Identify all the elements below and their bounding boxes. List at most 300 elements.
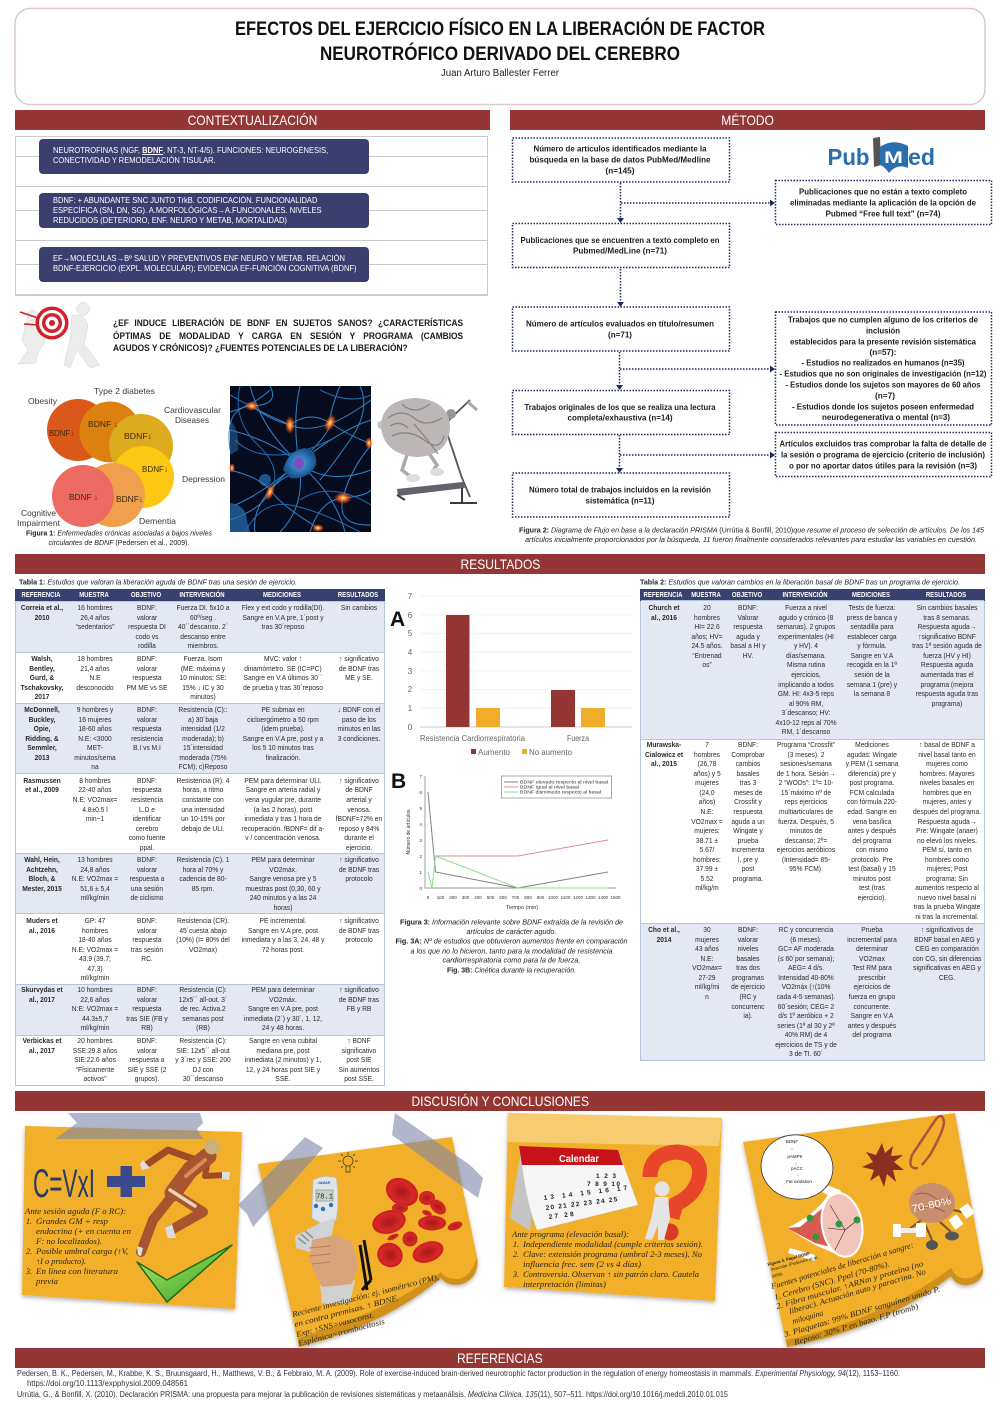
- table 1 header: REFERENCIA: [22, 590, 60, 599]
- row: Murawska: N.E:: [701, 807, 713, 816]
- row: Murawska: años): [699, 797, 715, 806]
- icon: calendar: 13 14 15 16 17: [543, 1185, 628, 1202]
- row: Murawska: hombres: [694, 750, 720, 759]
- chart A: studies with BDNF increase by modality: 5: [408, 629, 413, 638]
- row: Murawska: VO2max =: [691, 817, 723, 826]
- table 1 header: OBJETIVO: [131, 590, 161, 599]
- row: Murawska: mujeres: [695, 778, 719, 787]
- row: Church: RM, 1´descanso: [782, 727, 830, 736]
- row: Murawska: ml/kg/m: [695, 883, 719, 892]
- row: McDonnell: Buckley,: [29, 715, 55, 724]
- row: Murawska: Crossfit y: [734, 797, 762, 806]
- row: Walsh: 21,4 años: [80, 664, 110, 673]
- row: Church: HI= 22.6: [694, 622, 720, 631]
- chart B: recovery kinetics: 800: [524, 895, 532, 900]
- box: inclusion criteria exclusion: - Estudios donde los sujetos poseen enfermedad: [792, 401, 974, 411]
- box: included studies: [512, 473, 730, 517]
- row: Rasmussen: debajo de ULI.: [181, 824, 225, 833]
- note 3 text: 3.: [512, 1270, 519, 1279]
- row: Murawska: tras 3: [740, 778, 756, 787]
- chart B: recovery kinetics: [391, 770, 621, 911]
- row: Church: Tests de fuerza:: [849, 603, 895, 612]
- note 2 text: [290, 1272, 440, 1348]
- row: Murawska: (24,0: [699, 788, 715, 797]
- row: Muders: valorar: [137, 926, 157, 935]
- row: Correia: codo vs: [136, 632, 158, 641]
- icon: PubMed logo: M: [884, 148, 903, 167]
- row: Church: hombres: [694, 613, 720, 622]
- row: Murawska: nivel basal tanto en: [918, 750, 976, 759]
- chart B: recovery kinetics: B: [391, 770, 406, 793]
- row: Church: Fuerza a nivel: [785, 603, 827, 612]
- row: Rasmussen: Rasmussen: [23, 776, 61, 785]
- row: Murawska: 37.99 ±: [696, 864, 718, 873]
- row: Cho: cada 4-5 semanas).: [777, 992, 835, 1001]
- row: McDonnell: N.E: <3000: [78, 734, 112, 743]
- row: Church: aguda y: [736, 632, 760, 641]
- reference list: Urrútia, G., & Bonfill, X. (2010). Declaración PRISMA: una propuesta para mejorar la publicación de revisiones sistemáticas y metaanálisis. Medicina Clínica, 135(11), 507–511. https://doi.org/10.1016/j.medcli.2010.01.015: [17, 1390, 729, 1399]
- row: Walsh: minutos): [190, 692, 216, 701]
- row: Correia: “sedentarios”: [76, 622, 114, 631]
- row: Correia: 2010: [35, 613, 49, 622]
- row: Wahl: PEM para determinar: [251, 855, 315, 864]
- row: Wahl: VO2máx.: [269, 865, 297, 874]
- row: Murawska: mujeres, antes y: [923, 797, 971, 806]
- row: Cho: (≤ 60´por semana);: [778, 954, 834, 963]
- row: Cho: ml/kg/mi: [695, 982, 719, 991]
- chart B: recovery kinetics: 400: [474, 895, 482, 900]
- row: Murawska: 38.71 ±: [696, 836, 718, 845]
- row: Wahl: 240 minutos y a las 24: [250, 893, 316, 902]
- row: Verbickas: ↑ BDNF: [347, 1036, 371, 1045]
- chart: venn of chronic diseases and BDNF: BDNF ↓: [69, 492, 98, 502]
- icon: muscle cross-section: [770, 1165, 867, 1261]
- chart B: recovery kinetics: 4: [419, 822, 422, 827]
- row: Muders: Resistencia (CR).: [177, 916, 229, 925]
- table 2 header: MEDICIONES: [852, 590, 890, 599]
- row: Murawska: post: [742, 864, 754, 873]
- row: Rasmussen: recuperación. fBDNF= dif a-: [242, 824, 324, 833]
- note 4 text: 1. Cerebro (SNC). Ppal (70-80%).: [773, 1259, 891, 1302]
- chart B: recovery kinetics: 5: [419, 806, 422, 811]
- box: title and abstract: (n=71): [608, 329, 632, 339]
- row: Murawska: Wingate y: [733, 826, 763, 835]
- row: Church: tras 8 semanas.: [923, 613, 971, 622]
- row: Verbickas: Resistencia (C):: [179, 1036, 227, 1045]
- row: Rasmussen: cerebro: [136, 824, 158, 833]
- diagram: BDNF signalling circle: [756, 1129, 838, 1205]
- chart B: recovery kinetics: BDNF disminuido respecto al basal: [520, 790, 601, 794]
- note 1 text: 2.: [26, 1247, 32, 1256]
- row: Church: años; HV=: [691, 632, 723, 641]
- row: Murawska: minutos post: [853, 874, 891, 883]
- row: Church: programa): [932, 699, 962, 708]
- row: McDonnell: 15´intensidad: [183, 743, 223, 752]
- box: inclusion criteria exclusion: neurodegenerativa o mental (n=3): [822, 412, 950, 422]
- row: Wahl: Wahl, Hein,: [24, 855, 60, 864]
- row: Murawska: diferencia) pre y: [848, 769, 896, 778]
- row: Walsh: PM ME vs SE: [126, 683, 168, 692]
- formula C=VxI: C=VxI: [33, 1162, 95, 1206]
- box: inclusion criteria exclusion: [776, 312, 992, 425]
- icon: calendar: 20 21 22 23 24 25: [545, 1196, 618, 1212]
- caption: figure 3: Figura 3: Información relevante sobre BDNF extraída de la revisión de: [400, 920, 623, 926]
- chart B: recovery kinetics: 600: [499, 895, 507, 900]
- diagram: BDNF signalling circle: BDNF: [786, 1139, 798, 1144]
- icon: PubMed logo: ed: [908, 144, 935, 170]
- row: McDonnell: finalización.: [266, 753, 300, 762]
- row: Correia: Sin cambios: [341, 603, 377, 612]
- table 1 header: MUESTRA: [79, 590, 109, 599]
- row: Wahl: respuesta a: [130, 874, 164, 883]
- row: Verbickas: Verbickas et: [23, 1036, 61, 1045]
- row: Verbickas: al., 2017: [29, 1046, 55, 1055]
- row: McDonnell: Sangre en V.A pre, post y a: [243, 734, 323, 743]
- row: Cho: (6 meses).: [790, 935, 822, 944]
- note 2 text: Exp: ↑SNS=vasoconst.: [294, 1310, 375, 1339]
- row: Cho: valorar: [738, 935, 758, 944]
- row: Skurvydas: respuesta: [132, 1004, 162, 1013]
- row: Cho: VO2max: [859, 954, 885, 963]
- note 3 text: Controversia. Observan ↑ sin patrón claro. Cautela: [523, 1270, 699, 1279]
- row: McDonnell: 16 mujeres: [79, 715, 111, 724]
- row: Church: la semana 8: [854, 689, 890, 698]
- diagram: BDNF signalling circle: ↓: [797, 1172, 799, 1177]
- chart A: studies with BDNF increase by modality: [390, 592, 632, 757]
- row: Rasmussen: venosa.: [347, 805, 371, 814]
- row: Murawska: agudas: Wingate: [847, 750, 897, 759]
- caption: figure 3: artículos de carácter agudo.: [466, 929, 557, 936]
- caption: figure 3: cardiorrespiratoria como para la de fuerza.: [442, 958, 581, 965]
- row: Wahl: de ciclismo: [131, 893, 163, 902]
- row: McDonnell: paso de los: [342, 715, 376, 724]
- row: Muders: ↑ significativo: [339, 916, 379, 925]
- row: Rasmussen: resistencia: [131, 795, 163, 804]
- row: Cho: series (1ª al 30 y 2ª: [777, 1021, 835, 1030]
- chart A: studies with BDNF increase by modality: 2: [408, 685, 413, 694]
- box: inclusion criteria exclusion: establecidos para la presente revisión sistemática: [790, 336, 976, 346]
- row: Cho: Sangre en V.A: [851, 1011, 893, 1020]
- note 1 text: En línea con literatura: [35, 1267, 118, 1276]
- heading: método: MÉTODO: [721, 112, 774, 128]
- row: Murawska: (3 meses). 2: [788, 750, 824, 759]
- row: Church: Respuesta aguda: [921, 660, 973, 669]
- row: McDonnell: moderada); b): [182, 734, 224, 743]
- reference list: https://doi.org/10.1113/expphysiol.2009.048561: [27, 1379, 188, 1388]
- caption: figure 4: [767, 1251, 820, 1279]
- box: full reading: [512, 390, 730, 434]
- panel: discussion notes: [20, 1112, 986, 1348]
- box: full text publications: Publicaciones que se encuentren a texto completo en: [520, 235, 720, 245]
- row: Skurvydas: 24 y 48 horas.: [262, 1023, 304, 1032]
- row: Rasmussen: Resistencia (R). 4: [177, 776, 229, 785]
- box: included studies: Número total de trabajos incluidos en la revisión: [529, 485, 711, 495]
- table 1 header: [15, 589, 385, 601]
- row: Murawska: meses de: [734, 788, 762, 797]
- row: McDonnell: intensidad (1/2: [181, 724, 225, 733]
- caption: figure 1: [26, 530, 212, 547]
- row: Church: agudo y crónico (8: [779, 613, 833, 622]
- row: Walsh: de prueba y tras 30´reposo: [243, 683, 323, 692]
- row: Skurvydas: 12x5´´ all-out. 3´: [179, 995, 227, 1004]
- row: McDonnell: a) 30´baja: [188, 715, 218, 724]
- row: Cho: incremental para: [847, 935, 897, 944]
- row: Correia: BDNF:: [137, 603, 157, 612]
- icon: muscular runner: [141, 1150, 226, 1252]
- row: Cho: tras dos: [736, 963, 760, 972]
- row: Rasmussen: ↑ significativo: [339, 776, 379, 785]
- box: full text publications: [512, 224, 730, 268]
- row: Murawska: FCM calculada: [850, 788, 894, 797]
- reference list: [17, 1369, 900, 1399]
- chart B: recovery kinetics: 200: [449, 895, 457, 900]
- note 1 text: 3.: [25, 1267, 32, 1276]
- row: Murawska: PEM sí, tanto en: [922, 845, 972, 854]
- row: Church: press de banca y: [847, 613, 897, 622]
- row: Verbickas: valorar: [137, 1046, 157, 1055]
- row: Murawska: Mediciones: [855, 740, 889, 749]
- row: Church: ejercicios,: [791, 670, 821, 679]
- row: Murawska: multiarticulares de: [779, 807, 833, 816]
- chart A: studies with BDNF increase by modality: No aumento: [529, 748, 573, 757]
- note 2 text: Esplénica=trombocitosis: [296, 1317, 386, 1348]
- box: free full text exclusion: eliminadas mediante la aplicación de la opción de: [790, 198, 976, 208]
- row: Wahl: de BDNF tras: [339, 865, 379, 874]
- row: Murawska: Murawska-: [647, 740, 681, 749]
- row: Cho: fuerza en grupo: [849, 992, 895, 1001]
- image: neurons: [228, 386, 373, 532]
- row: Rasmussen: 4.8±0.5 l: [82, 805, 108, 814]
- row: Rasmussen: como fuente: [129, 833, 165, 842]
- row: Wahl: cadencia de 80-: [179, 874, 227, 883]
- row: Murawska: fuerza. Después, 5: [778, 817, 834, 826]
- row: Muders: GP: 47: [85, 916, 105, 925]
- row: Verbickas: SIE:22.6 años: [74, 1055, 116, 1064]
- row: Murawska: 7: [705, 740, 709, 749]
- chart: venn of chronic diseases and BDNF: BDNF↓: [142, 464, 168, 474]
- row: Church: fuerza (HV y HI): [923, 651, 971, 660]
- heading: referencias: REFERENCIAS: [457, 1350, 543, 1366]
- row: Rasmussen: et al., 2009: [25, 785, 59, 794]
- row: Verbickas: SSE.: [275, 1074, 291, 1083]
- row: Walsh: ↑ significativo: [339, 654, 379, 663]
- row: Cho: antes y después: [848, 1021, 896, 1030]
- caption: figure 4: Figura 4. Papel BDNF: [767, 1251, 811, 1267]
- row: Muders: VO2max): [189, 945, 217, 954]
- row: Cho: 27-29: [698, 973, 716, 982]
- row: McDonnell: resistencia: [131, 734, 163, 743]
- row: Skurvydas: ↑ significativo: [339, 985, 379, 994]
- row: Muders: 18-40 años: [78, 935, 112, 944]
- row: Church: “Entrenad: [692, 651, 722, 660]
- box: full reading: Trabajos originales de los que se realiza una lectura: [524, 402, 716, 412]
- row: McDonnell: FCM); c)Reposo: [179, 762, 227, 771]
- row: Correia: Correia et al.,: [21, 603, 63, 612]
- row: Rasmussen: N.E: VO2max=: [73, 795, 117, 804]
- row: Verbickas: 30´´descanso: [183, 1074, 223, 1083]
- note 3: training programme: [504, 1113, 722, 1301]
- icon: hand dynamometer: JAMAR: [318, 1181, 331, 1185]
- row: Murawska: al., 2015: [651, 759, 677, 768]
- row: Skurvydas: valorar: [137, 995, 157, 1004]
- note 4 text: miloquina: [791, 1308, 824, 1326]
- row: Cho: significativas en AEG y: [913, 963, 981, 972]
- row: Murawska: (Intensidad= 85-: [782, 855, 830, 864]
- context box 3: EF→MOLÉCULAS→Bº SALUD Y PREVENTIVOS ENF NEURO Y METAB. RELACIÓN: [53, 254, 345, 263]
- table 1 header: MEDICIONES: [263, 590, 301, 599]
- diagram: BDNF signalling circle: ↓: [795, 1161, 797, 1166]
- row: Rasmussen: 22-40 años: [78, 785, 112, 794]
- table 2 header: MUESTRA: [691, 590, 721, 599]
- row: Church: 4x10-12 reps al 70%: [775, 718, 837, 727]
- row: Murawska: 95% FCM).: [789, 864, 823, 873]
- row: Skurvydas: BDNF:: [137, 985, 157, 994]
- row: Murawska: hombres como: [925, 855, 969, 864]
- row: Muders: [16, 913, 384, 984]
- icon: hand dynamometer: 78.1: [316, 1194, 333, 1202]
- box: identified articles: [512, 138, 730, 182]
- row: Murawska: con mismo: [856, 845, 888, 854]
- row: Cho: del programa: [852, 1030, 892, 1039]
- chart A: studies with BDNF increase by modality: 6: [408, 611, 413, 620]
- row: Cho: CEG.: [939, 973, 955, 982]
- row: Walsh: N.E: [89, 673, 101, 682]
- row: Muders: tras sesión: [131, 945, 163, 954]
- chart: venn of chronic diseases and BDNF: Type 2 diabetes: [94, 386, 155, 396]
- row: Rasmussen: inmediata y tras 1 hora de: [245, 814, 321, 823]
- chart B: recovery kinetics: 2: [419, 854, 422, 859]
- chart B: recovery kinetics: 300: [462, 895, 470, 900]
- row: Walsh: [16, 652, 384, 703]
- row: Murawska: 2 “WODs”: 1º= 10-: [779, 778, 833, 787]
- row: Church: HV.: [743, 651, 753, 660]
- row: Rasmussen: Sangre en arteria radial y: [246, 785, 320, 794]
- heading: discusión y conclusiones: [15, 1091, 985, 1111]
- row: McDonnell: respuesta: [132, 724, 162, 733]
- icon: brain on treadmill: [378, 398, 478, 504]
- chart A: studies with BDNF increase by modality: A: [390, 608, 405, 631]
- row: Cho: 60´sesión; CEG= 2: [778, 1002, 834, 1011]
- row: McDonnell: minutos/sema: [74, 753, 116, 762]
- chart B: recovery kinetics: 1000: [548, 895, 559, 900]
- table 1: acute studies: [15, 589, 385, 1086]
- row: Muders: 43.9 (39.7;: [79, 954, 111, 963]
- row: Correia: Fuerza DI. 5x10 a: [177, 603, 229, 612]
- table 2 header: [640, 589, 985, 601]
- row: Murawska: respuesta: [733, 807, 763, 816]
- chart: venn of chronic diseases and BDNF: BDNF↓: [116, 494, 143, 504]
- row: Murawska: ni tras la incremental.: [915, 912, 979, 921]
- note 3 text: 2.: [513, 1250, 519, 1259]
- row: Church: 20: [703, 603, 711, 612]
- box: full text publications: Pubmed/MedLine (n=71): [573, 246, 667, 256]
- chart: venn of chronic diseases and BDNF: Impairment: [17, 518, 61, 528]
- row: Church: semana 1 (pre) y: [847, 680, 897, 689]
- chart B: recovery kinetics: 6: [419, 790, 422, 795]
- diagram: BDNF signalling circle: ↓: [791, 1146, 793, 1151]
- heading: discusión y conclusiones: DISCUSIÓN Y CONCLUSIONES: [411, 1093, 589, 1109]
- row: Church: Respuesta aguda→: [918, 622, 976, 631]
- row: Cho: RC y concurrencia: [779, 925, 833, 934]
- row: Rasmussen: vena yugular pre, durante: [245, 795, 321, 804]
- row: Verbickas: “Físicamente: [76, 1065, 114, 1074]
- row: Murawska: Respuesta aguda→: [918, 817, 976, 826]
- row: Murawska: Comprobar: [731, 750, 765, 759]
- row: Skurvydas: PEM para determinar: [251, 985, 315, 994]
- row: Wahl: ml/kg/min: [81, 893, 109, 902]
- row: McDonnell: los 5 10 minutos tras: [252, 743, 314, 752]
- box: identified articles: (n=145): [606, 166, 635, 176]
- diagram: BDNF signalling circle: pAMPK: [787, 1154, 803, 1159]
- row: Murawska: prueba: [738, 836, 758, 845]
- box: inclusion criteria exclusion: (n=7): [875, 390, 895, 400]
- note 4 text: Fuentes potenciales de liberación a sangre:: [769, 1240, 915, 1291]
- row: Murawska: aguda a un: [731, 817, 765, 826]
- chart B: recovery kinetics: Tiempo (min): [506, 905, 538, 911]
- row: Walsh: Gurd, &: [30, 673, 54, 682]
- note 2 text: en contra premisas. ↑ BDNF.: [293, 1293, 399, 1329]
- context box 2: BDNF: + ABUNDANTE SNC JUNTO TrkB. CODIFICACIÓN. FUNCIONALIDAD: [53, 196, 317, 204]
- row: Church: experimentales (HI: [778, 632, 834, 641]
- chart A: studies with BDNF increase by modality: 1: [408, 704, 413, 713]
- chart: venn of chronic diseases and BDNF: BDNF↓: [49, 428, 74, 438]
- caption: figure 2: [519, 527, 984, 544]
- box: title and abstract: [512, 307, 730, 351]
- box: title and abstract: Número de artículos evaluados en título/resumen: [526, 318, 714, 328]
- title block: [14, 8, 986, 106]
- row: Cho: N.E:: [701, 954, 713, 963]
- row: Murawska: reps ejercicios: [785, 797, 827, 806]
- research questions: AGUDOS Y CRÓNICOS)? ¿FUENTES POTENCIALES DE LA LIBERACIÓN?: [112, 343, 407, 353]
- row: Verbickas: [16, 1035, 384, 1085]
- table 2 header: OBJETIVO: [732, 590, 762, 599]
- row: McDonnell: moderada (75%: [179, 753, 227, 762]
- row: Church: sesión de la: [854, 670, 890, 679]
- row: Verbickas: SSE:29.8 años: [73, 1046, 117, 1055]
- chart B: recovery kinetics: 0: [419, 886, 422, 891]
- row: Skurvydas: al., 2017: [29, 995, 55, 1004]
- row: Skurvydas: [16, 984, 384, 1035]
- row: Church: y HV). 4: [794, 641, 818, 650]
- row: Cho: 43 años: [695, 944, 719, 953]
- row: Skurvydas: FB y RB: [347, 1004, 371, 1013]
- row: Walsh: desconocido: [76, 683, 114, 692]
- row: Skurvydas: VO2máx.: [269, 995, 297, 1004]
- row: Cho: Test RM para: [852, 963, 892, 972]
- row: McDonnell: ↓ BDNF con el: [338, 705, 380, 714]
- row: Murawska: l, pre y: [738, 855, 758, 864]
- note 2: isometric and blood cells: [238, 1113, 483, 1348]
- chart B: recovery kinetics: Número de artículos: [406, 809, 412, 855]
- chart: venn of chronic diseases and BDNF: Diseases: [175, 415, 209, 425]
- row: Muders: de BDNF tras: [339, 926, 379, 935]
- row: Murawska: mujeres:: [694, 826, 720, 835]
- row: Cho: 2014: [657, 935, 671, 944]
- note 4 text: 3. Plaquetas: 99% BDNF sanguíneo unido P.: [782, 1285, 941, 1339]
- row: Rasmussen: v / concentración venosa.: [245, 833, 321, 842]
- row: Muders: inmediata y a las 3, 24, 48 y: [242, 935, 324, 944]
- row: Murawska: años) y 5: [693, 769, 721, 778]
- row: Murawska: test (basal) y 15: [848, 864, 896, 873]
- arrows between boxes: [616, 183, 775, 473]
- row: Verbickas: 20 hombres: [77, 1036, 113, 1045]
- row: Rasmussen: arterial y: [346, 795, 372, 804]
- box: inclusion criteria exclusion: - Estudios donde los sujetos son mayores de 60 años: [786, 379, 981, 389]
- row: Muders: 45´cuesta abajo: [179, 926, 227, 935]
- row: Wahl: BDNF:: [137, 855, 157, 864]
- row: Cho: CEG en comparación: [915, 944, 979, 953]
- row: Rasmussen: constante con: [182, 795, 224, 804]
